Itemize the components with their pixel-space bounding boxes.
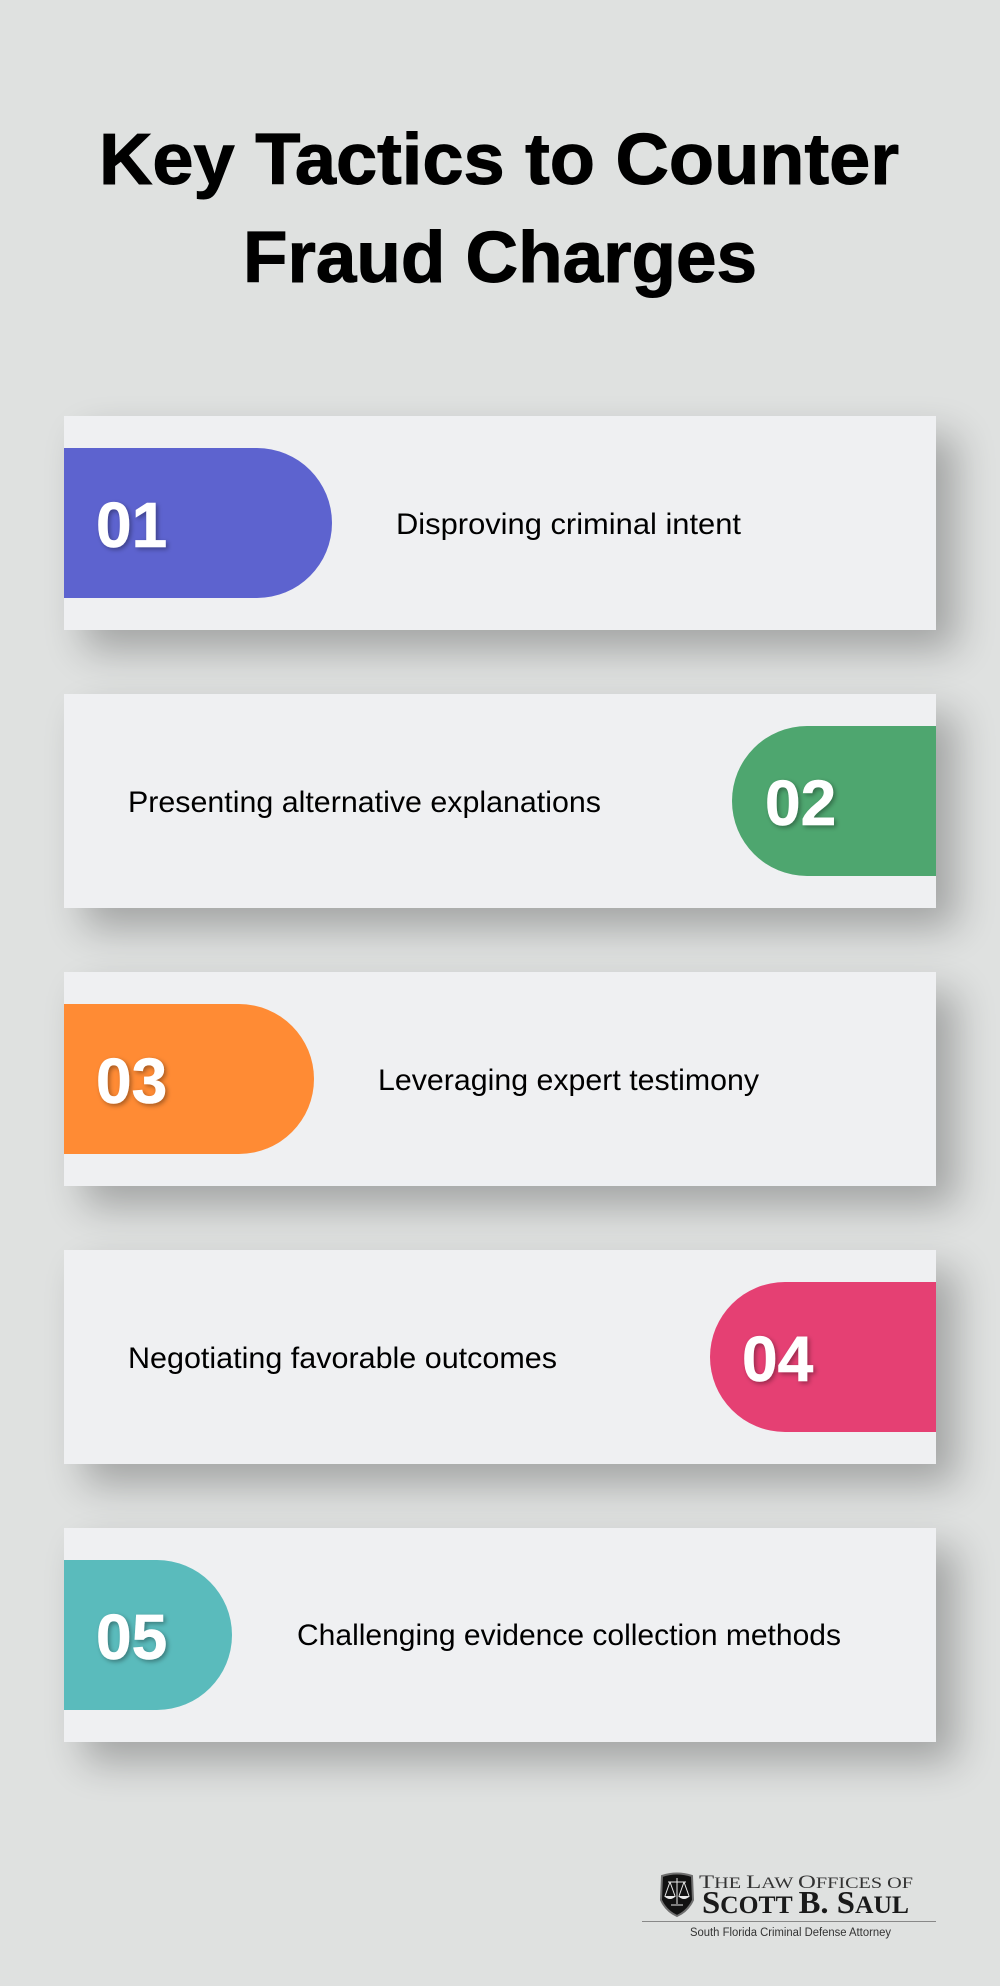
logo text: The Law Offices of: THE LAW O FFICES OF — [699, 1872, 913, 1893]
text: Disproving criminal intent: Disproving criminal intent — [396, 508, 742, 541]
panel: step 05 — [64, 1528, 956, 1762]
number pill 03 — [64, 1004, 314, 1154]
number pill 04: 04 — [742, 1323, 814, 1395]
logo text: Scott B. Saul: SCOTT B. SAUL — [702, 1884, 909, 1920]
panel: step 02 — [64, 694, 956, 928]
number pill 01 — [64, 448, 332, 598]
title — [99, 120, 899, 298]
logo tagline: South Florida Criminal Defense Attorney — [690, 1927, 891, 1939]
panel: step 04 — [64, 1250, 956, 1484]
number pill 02 — [732, 726, 936, 876]
text: Challenging evidence collection methods: Challenging evidence collection methods — [297, 1619, 841, 1652]
number pill 02: 02 — [765, 767, 836, 839]
title: Fraud Charges — [243, 218, 757, 298]
panel: step 03 — [64, 972, 956, 1206]
number pill 05: 05 — [96, 1601, 167, 1673]
text: Negotiating favorable outcomes: Negotiating favorable outcomes — [128, 1342, 557, 1375]
title: Key Tactics to Counter — [99, 120, 899, 200]
number pill 05 — [64, 1560, 232, 1710]
number pill 04 — [710, 1282, 936, 1432]
text: Presenting alternative explanations: Presenting alternative explanations — [128, 786, 601, 819]
number pill 01: 01 — [96, 489, 167, 561]
logo — [642, 1872, 936, 1939]
icon: shield with scales — [661, 1874, 693, 1916]
text: Leveraging expert testimony: Leveraging expert testimony — [378, 1064, 759, 1097]
number pill 03: 03 — [96, 1045, 167, 1117]
panel: step 01 — [64, 416, 956, 650]
